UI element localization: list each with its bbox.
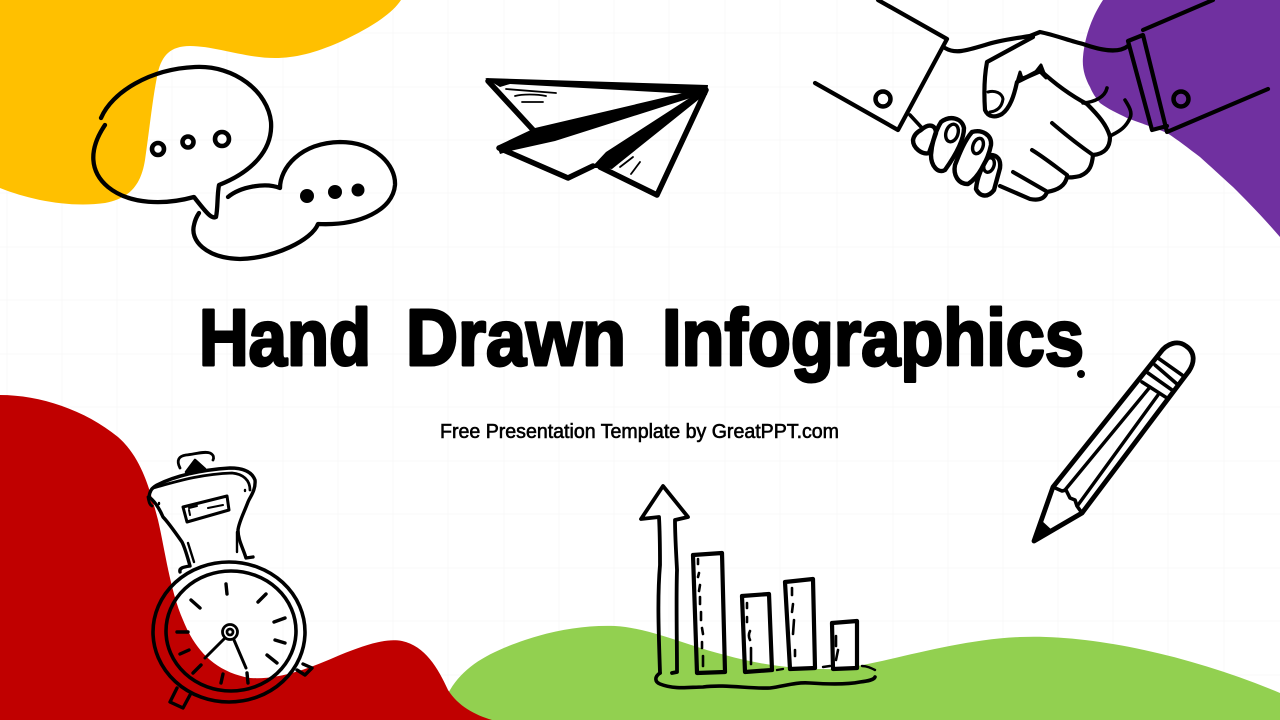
clock ticks bbox=[177, 584, 285, 683]
fingernails bbox=[944, 123, 996, 174]
bar texture dashes bbox=[698, 559, 838, 666]
right cuff button bbox=[1174, 92, 1188, 106]
icon: bar chart with arrow bbox=[641, 486, 875, 688]
right cuff bbox=[1128, 0, 1268, 132]
outer ring bbox=[153, 562, 305, 702]
title: Infographics bbox=[662, 293, 1084, 382]
inner ring bbox=[166, 571, 296, 691]
top of hands bbox=[945, 32, 1128, 51]
wrist lines bbox=[910, 88, 1131, 135]
icon: handshake bbox=[815, 0, 1268, 200]
display plate bbox=[183, 496, 229, 522]
clock handle and bell bbox=[178, 452, 214, 468]
ferrule bands bbox=[1142, 358, 1182, 398]
body details bbox=[159, 490, 245, 562]
icon: speech bubbles bbox=[93, 67, 395, 259]
clock top body bbox=[149, 468, 255, 572]
clock hub bbox=[222, 624, 238, 640]
clock feet bbox=[170, 664, 312, 708]
clock hands bbox=[205, 638, 246, 668]
bar 4 bbox=[832, 621, 857, 669]
pencil body bbox=[1034, 343, 1193, 541]
bar 1 bbox=[693, 553, 725, 673]
small speech bubble bbox=[193, 142, 395, 259]
blob: green bottom bbox=[430, 626, 1280, 720]
plane fold lines bbox=[506, 89, 640, 174]
left cuff button bbox=[876, 92, 890, 106]
sharpened edge bbox=[1053, 487, 1082, 513]
pencil shaft lines bbox=[1065, 387, 1158, 505]
bar 3 bbox=[785, 579, 815, 669]
icon: paper airplane bbox=[485, 78, 708, 195]
ground line bbox=[656, 673, 875, 688]
icon: alarm clock bbox=[148, 452, 312, 708]
thumb and right hand bbox=[984, 37, 1110, 200]
icon: pencil bbox=[1033, 343, 1193, 543]
solid dots bbox=[300, 184, 364, 203]
pencil lead bbox=[1033, 520, 1053, 543]
hollow dots bbox=[152, 132, 229, 155]
blob: yellow top left bbox=[0, 0, 401, 205]
blob: red bottom left bbox=[0, 395, 492, 720]
left cuff bbox=[815, 0, 947, 130]
title bbox=[199, 293, 1084, 382]
blob: purple top right bbox=[1083, 0, 1280, 237]
title: Drawn bbox=[406, 293, 626, 382]
subtitle: Free Presentation Template by GreatPPT.com bbox=[440, 421, 839, 443]
finger lines bbox=[1013, 123, 1093, 191]
large speech bubble bbox=[93, 67, 271, 217]
up arrow bbox=[641, 486, 688, 673]
title: Hand bbox=[199, 293, 371, 382]
bar 2 bbox=[742, 594, 772, 672]
left fingers bbox=[913, 118, 1000, 196]
